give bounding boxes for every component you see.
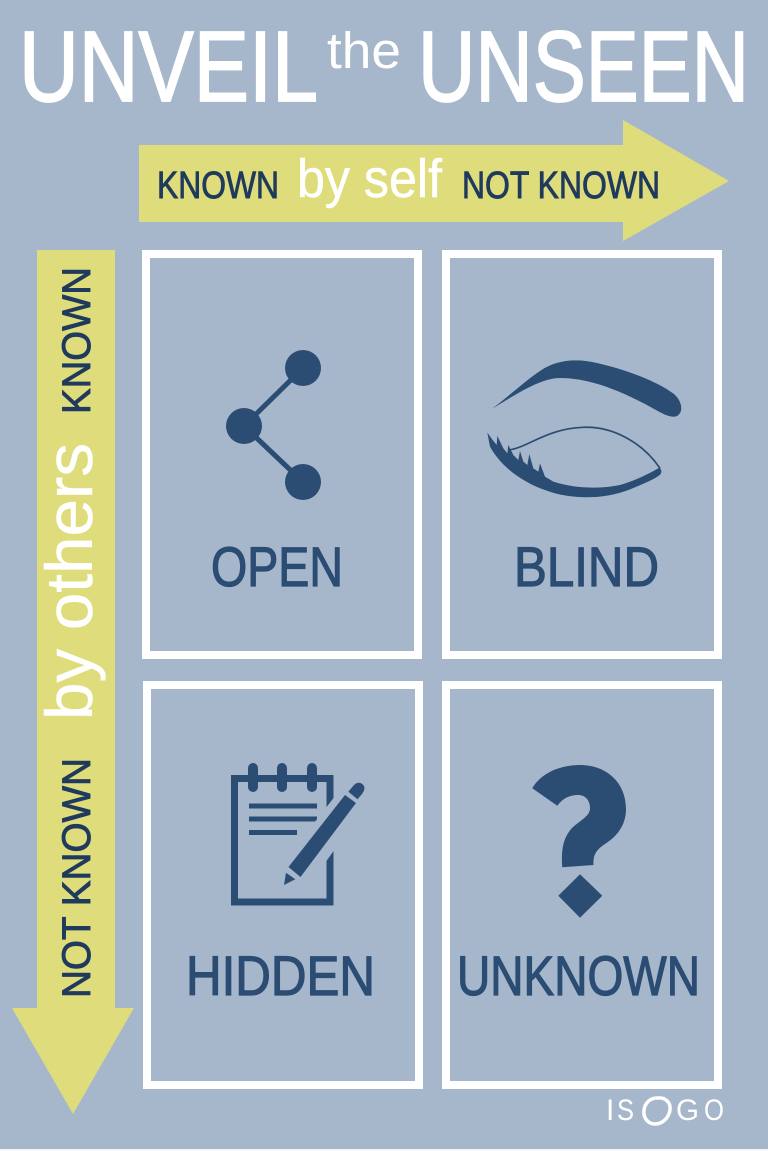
arrow: known by self: KNOWN <box>157 165 279 207</box>
arrow: known by self <box>139 120 729 241</box>
logo: isogo: G <box>676 1094 699 1127</box>
panel: unknown <box>446 685 718 1085</box>
label: open: OPEN <box>211 535 343 598</box>
logo: isogo <box>606 1094 724 1127</box>
arrow: known by others: NOT KNOWN <box>55 758 99 998</box>
arrow: known by others: KNOWN <box>55 267 99 414</box>
arrow: known by self: NOT KNOWN <box>462 165 660 207</box>
icon: share nodes <box>226 350 321 500</box>
logo: isogo: I <box>606 1094 614 1127</box>
arrow: known by others <box>12 250 134 1114</box>
icon: question mark <box>532 765 626 918</box>
title: the <box>327 22 401 79</box>
icon: closed eye <box>487 360 681 497</box>
logo: isogo: S <box>617 1094 634 1127</box>
arrow: known by self: by self <box>297 149 443 209</box>
panel: blind <box>446 254 718 655</box>
title: UNVEIL <box>19 11 318 123</box>
label: hidden: HIDDEN <box>186 944 375 1007</box>
label: unknown: UNKNOWN <box>457 944 700 1007</box>
logo: isogo: O <box>704 1094 724 1127</box>
arrow: known by others: by others <box>32 443 106 720</box>
panel: open <box>146 254 418 655</box>
panel: hidden <box>147 685 419 1085</box>
icon: notepad and pencil <box>234 763 370 902</box>
label: blind: BLIND <box>514 535 659 598</box>
title <box>19 11 749 123</box>
